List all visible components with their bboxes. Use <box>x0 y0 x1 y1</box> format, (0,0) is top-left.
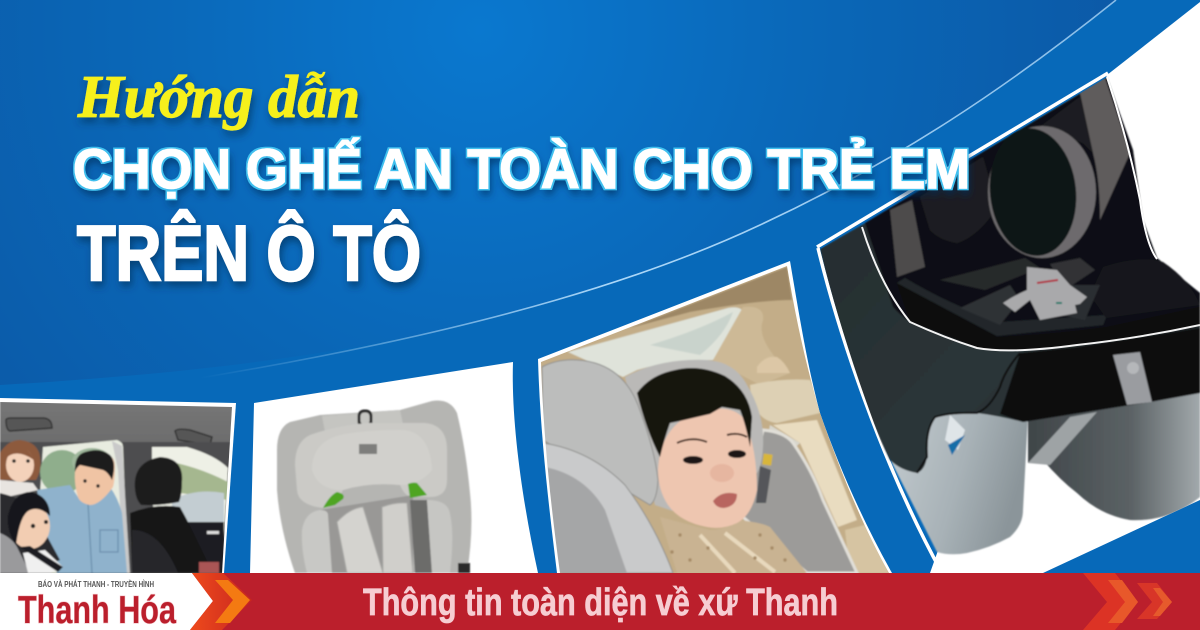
title block <box>73 64 970 297</box>
headrest <box>988 126 1096 258</box>
front black bar <box>1000 328 1200 422</box>
car door window with trees <box>35 440 128 573</box>
title: script line: Hướng dẫn <box>77 64 360 130</box>
strap clip <box>1113 352 1152 405</box>
logo orange chevron <box>190 573 252 630</box>
right window <box>150 446 228 537</box>
white piping <box>1107 77 1157 259</box>
left seat wing <box>542 360 658 505</box>
mesh <box>920 157 997 243</box>
face and hair <box>660 517 807 573</box>
footer bar <box>0 573 1200 630</box>
slogan: Thông tin toàn diện về xứ Thanh <box>363 582 838 624</box>
seat headrest <box>625 360 763 520</box>
seat shell <box>820 77 1200 473</box>
right grey base lobe <box>1028 390 1200 520</box>
photo panel: grey booster seat <box>250 362 538 573</box>
logo tagline: BÁO VÀ PHÁT THANH - TRUYỀN HÌNH <box>38 579 154 589</box>
seat cushion <box>897 283 1200 350</box>
inner seat back <box>865 78 1200 350</box>
white corner behind car seat <box>930 2 1200 573</box>
rear car seat wing <box>743 430 857 573</box>
buckle <box>1003 267 1087 320</box>
photo panel: parents and child in car <box>0 395 240 575</box>
title: second line: TRÊN Ô TÔ <box>77 209 421 297</box>
photo panel: baby in car seat <box>535 260 895 575</box>
mother <box>0 440 40 480</box>
logo white plate <box>0 573 213 630</box>
left grey base lobe <box>888 410 1028 554</box>
father <box>37 485 127 573</box>
child in seat <box>0 492 60 562</box>
front seat <box>135 457 182 505</box>
title: main line: CHỌN GHẾ AN TOÀN CHO TRẺ EM <box>73 137 970 200</box>
grey side panels <box>1080 78 1130 220</box>
photo panel: black infant car seat <box>817 73 1200 573</box>
right chevrons <box>1083 573 1172 630</box>
